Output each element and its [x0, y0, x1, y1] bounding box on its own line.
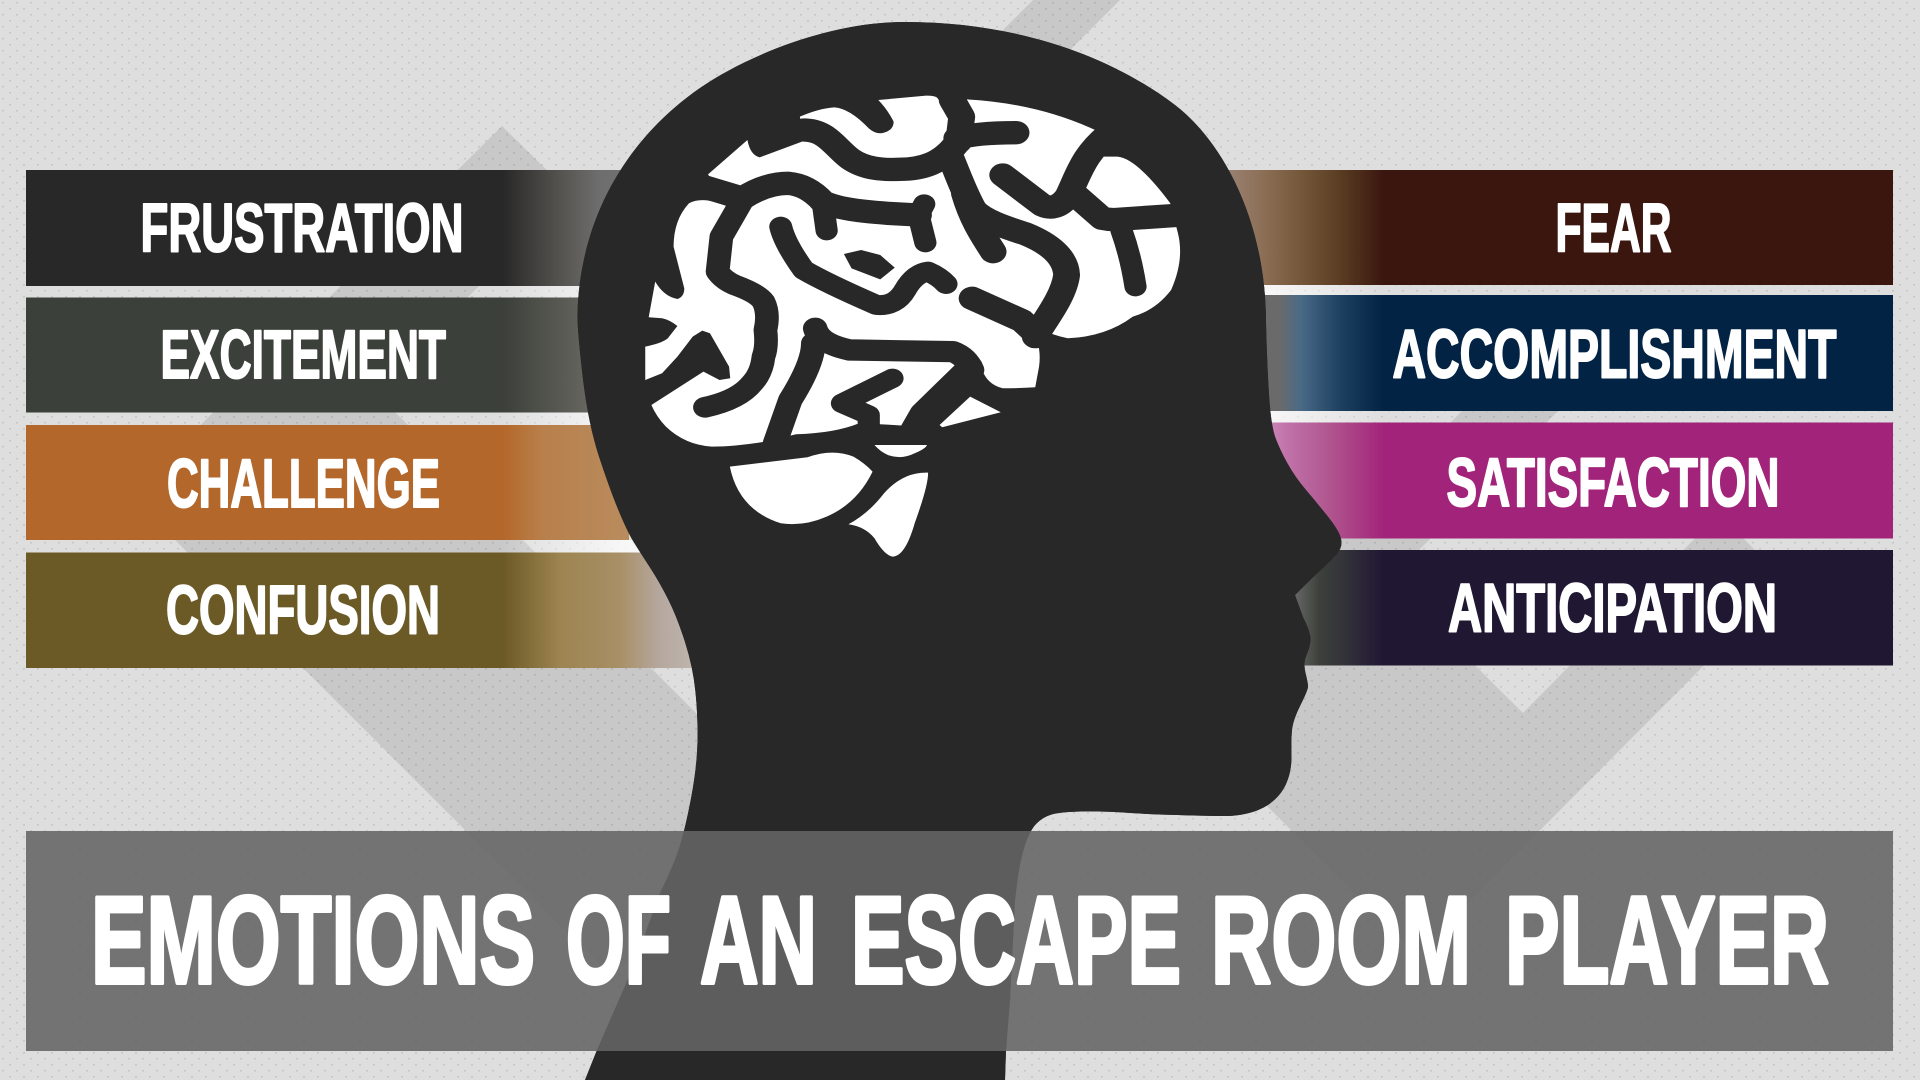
bar: excitement: EXCITEMENT — [160, 316, 446, 393]
bar: excitement — [26, 298, 700, 412]
bar: confusion: CONFUSION — [166, 572, 440, 648]
bar: challenge: CHALLENGE — [167, 445, 440, 522]
bar: fear — [1200, 170, 1893, 285]
panel: right emotion bars — [1200, 170, 1893, 666]
bar: challenge — [26, 425, 629, 540]
bar: frustration — [26, 170, 700, 286]
bar: anticipation — [1200, 550, 1893, 666]
bar: confusion — [26, 552, 700, 668]
title text: ROOM — [1211, 872, 1471, 1010]
head silhouette — [577, 22, 1342, 1080]
title text: ESCAPE — [851, 872, 1181, 1010]
icon: brain — [643, 96, 1183, 557]
bar: accomplishment — [1200, 295, 1893, 411]
bar: frustration: FRUSTRATION — [140, 190, 464, 266]
bar: fear: FEAR — [1556, 190, 1672, 266]
title text: OF — [566, 872, 671, 1010]
title text: AN — [700, 872, 817, 1010]
title text: EMOTIONS — [91, 872, 535, 1010]
bar: satisfaction — [1200, 422, 1893, 538]
panel: left emotion bars — [26, 170, 700, 668]
bar: anticipation: ANTICIPATION — [1448, 570, 1777, 646]
title banner — [26, 831, 1893, 1051]
